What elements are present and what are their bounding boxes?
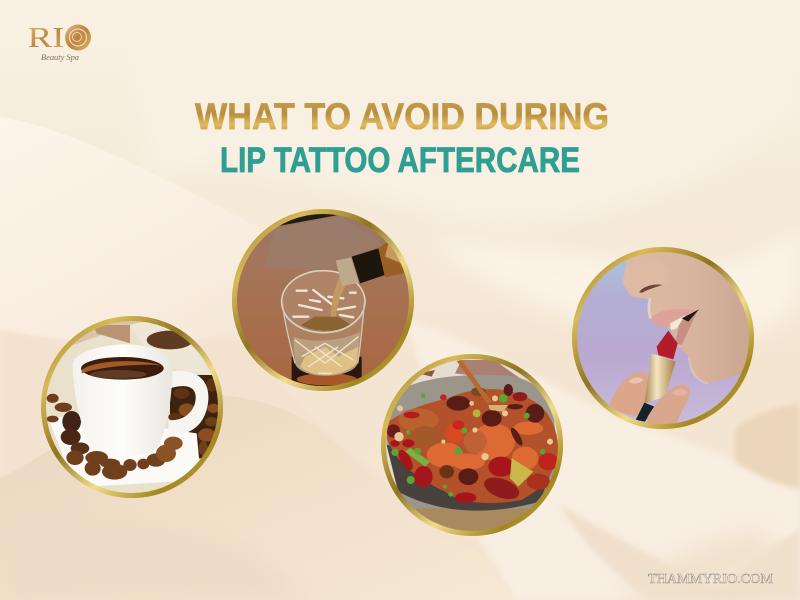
title line 2: LIP TATTOO AFTERCARE [220, 141, 580, 180]
watermark: THAMMYRIO.COM [648, 571, 773, 586]
logo: Rio Beauty Spa [28, 23, 91, 62]
logo tagline: Beauty Spa [41, 53, 79, 62]
logo wordmark: RI [28, 23, 64, 54]
icon: coffee photo circle [41, 316, 223, 498]
icon: alcohol photo circle [232, 209, 414, 391]
logo rose emblem [65, 24, 91, 50]
title line 1: WHAT TO AVOID DURING [195, 96, 609, 137]
icon: spicy food photo circle [381, 354, 563, 536]
title [195, 96, 609, 180]
icon: lipstick photo circle [572, 247, 754, 429]
